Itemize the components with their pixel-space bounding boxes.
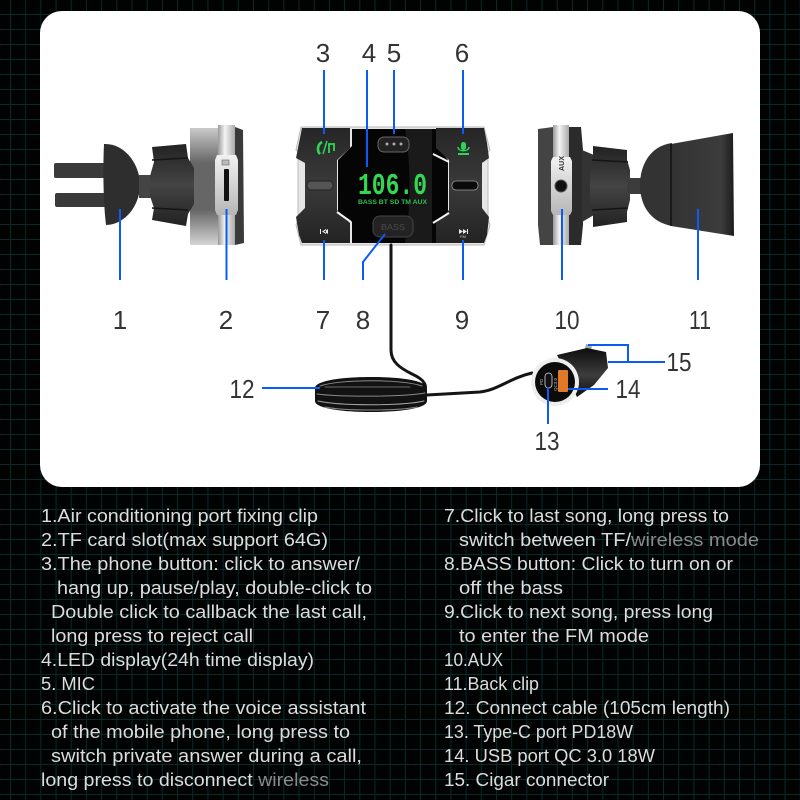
right button panel — [436, 128, 489, 243]
TF card slot — [224, 169, 229, 201]
neck — [627, 178, 641, 194]
feature list: left column: long press to disconnect wireless — [41, 770, 329, 790]
black centre face — [338, 129, 448, 243]
device: front view — [296, 127, 490, 245]
knob ribs — [152, 158, 188, 210]
TF card panel — [215, 155, 238, 215]
feature list: right column: 12. Connect cable (105cm length) — [444, 698, 730, 718]
feature list: right column: 8.BASS button: Click to turn on or — [444, 554, 733, 574]
cigar charger — [531, 344, 608, 406]
number callouts: 5 — [387, 38, 401, 68]
collar — [582, 150, 594, 222]
feature list: left column — [41, 506, 372, 790]
lead to charger — [427, 373, 532, 395]
bevel highlights — [337, 154, 449, 223]
coil — [315, 377, 427, 412]
ball joint dome — [103, 144, 140, 225]
rear housing — [190, 128, 222, 245]
feature list: right column: 7.Click to last song, long press to — [444, 506, 729, 526]
chrome frame — [296, 127, 490, 245]
glossy reflection — [405, 129, 432, 243]
LED frequency display: 106.0 — [358, 169, 427, 204]
feature list: right column: 13. Type-C port PD18W — [444, 722, 633, 742]
number callouts: 3 — [316, 38, 330, 68]
silver strip — [218, 125, 235, 245]
feature list: right column: 14. USB port QC 3.0 18W — [444, 746, 655, 766]
feature list: left column: 5. MIC — [41, 674, 95, 694]
adjustment knob — [590, 146, 630, 227]
right slider — [452, 181, 478, 190]
feature list: right column: 10.AUX — [444, 650, 503, 670]
number callouts: 15 — [666, 347, 692, 377]
icon: phone and music — [318, 141, 334, 154]
vertical lead — [391, 245, 425, 390]
number callouts: 11 — [689, 305, 711, 335]
rear housing — [569, 127, 583, 245]
number callouts: 8 — [356, 305, 370, 335]
black face — [535, 362, 575, 402]
adjustment knob — [150, 144, 194, 226]
dome — [640, 143, 672, 226]
feature list: left column: 6.Click to activate the voice assistant — [41, 698, 366, 718]
feature list: left column: 3.The phone button: click to answer/ — [41, 554, 360, 574]
device: left side view with air vent clip — [54, 125, 244, 245]
PD marking: PD — [539, 378, 544, 385]
number callouts: 4 — [362, 38, 376, 68]
number callouts: 6 — [455, 38, 469, 68]
AUX panel — [551, 157, 572, 215]
back clip cup — [671, 133, 734, 236]
silver strip — [553, 125, 569, 245]
number callouts — [113, 38, 711, 456]
number callouts: 12 — [230, 374, 254, 404]
AUX label: AUX — [559, 156, 566, 171]
front face edge — [235, 127, 244, 245]
leader lines — [120, 70, 698, 424]
left button panel — [296, 128, 350, 243]
feature list: left column: long press to reject call — [51, 626, 253, 646]
feature list: left column: 1.Air conditioning port fixing clip — [41, 506, 318, 526]
icon: previous track — [320, 229, 328, 234]
USB port — [558, 370, 568, 392]
microphone grille — [378, 137, 409, 152]
number callouts: 1 — [113, 305, 127, 335]
connect cable — [315, 245, 532, 412]
charger tip — [584, 344, 592, 352]
feature list: left column: Double click to callback the last call, — [51, 602, 367, 622]
feature list: right column: switch between TF/ wireless mode — [459, 530, 759, 550]
Type-C port — [545, 373, 552, 388]
feature list: right column — [444, 506, 759, 790]
device: right side view with back clip — [538, 125, 734, 245]
air vent clip prongs — [54, 163, 110, 207]
BASS button: BASS — [381, 222, 405, 232]
front face edge — [538, 127, 553, 245]
feature list: left column: 4.LED display(24h time display) — [41, 650, 314, 670]
feature list: right column: 15. Cigar connector — [444, 770, 609, 790]
number callouts: 2 — [219, 305, 233, 335]
AUX jack — [555, 180, 567, 192]
cup seam — [670, 144, 672, 226]
feature list: left column: of the mobile phone, long press to — [51, 722, 350, 742]
feature list: right column: 9.Click to next song, press long — [444, 602, 713, 622]
number callouts: 14 — [616, 374, 640, 404]
panel: white product card — [40, 11, 760, 487]
feature list: right column: to enter the FM mode — [459, 626, 649, 646]
icon: next track — [459, 229, 468, 234]
neck — [139, 175, 153, 198]
TF icon — [222, 160, 229, 165]
number callouts: 9 — [455, 305, 469, 335]
QC marking: QC3.0 — [553, 377, 558, 391]
LED status labels: BASS BT SD TM AUX — [358, 199, 428, 206]
feature list: right column: 11.Back clip — [444, 674, 539, 694]
feature list: left column: hang up, pause/play, double-click to — [57, 578, 372, 598]
left slider — [307, 181, 333, 190]
number callouts: 7 — [316, 305, 330, 335]
feature list: left column: 2.TF card slot(max support 64G) — [41, 530, 328, 550]
number callouts: 10 — [554, 305, 580, 335]
BASS button — [373, 216, 413, 237]
FM label: FM — [460, 234, 466, 239]
feature list: right column: off the bass — [459, 578, 563, 598]
number callouts: 13 — [534, 426, 560, 456]
knob ribs — [592, 160, 628, 210]
charger body — [557, 348, 608, 397]
feature list: left column: switch private answer during a call, — [51, 746, 362, 766]
white face ring — [531, 358, 579, 406]
icon: microphone — [458, 142, 469, 155]
